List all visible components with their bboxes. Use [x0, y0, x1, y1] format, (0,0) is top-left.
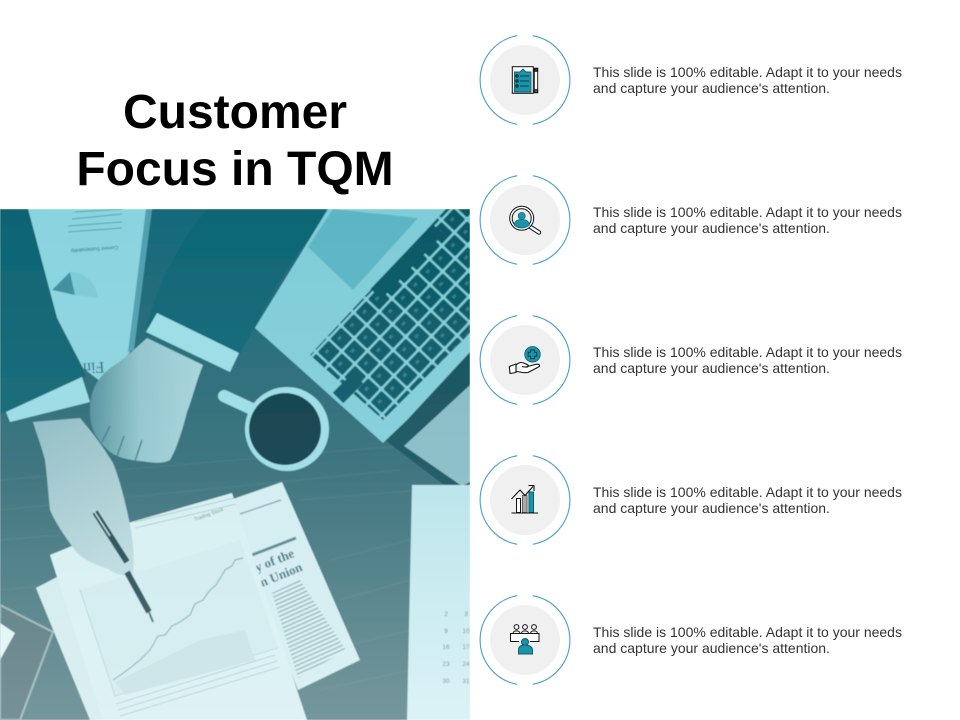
- right hand: [90, 338, 203, 463]
- item 1: clipboard ring and icon: [480, 35, 570, 125]
- text block 3: This slide is 100% editable. Adapt it to your needs: [593, 344, 902, 360]
- trading report with chart: [36, 493, 307, 720]
- item 2: magnifier ring and icon: [480, 175, 570, 265]
- calendar sheet: 9: [444, 628, 448, 635]
- text block 2: [593, 204, 902, 236]
- text block 1: and capture your audience's attention.: [593, 80, 830, 96]
- calendar sheet: 17: [462, 644, 470, 651]
- newspaper: n Union: [258, 559, 305, 590]
- calendar sheet: 2: [444, 611, 448, 618]
- paper: top-left report: Fin: [82, 358, 105, 376]
- laptop with keyboard and tablet: [255, 209, 470, 499]
- calendar sheet: 31: [462, 678, 470, 685]
- icon: bar chart with rising arrow: [512, 486, 538, 513]
- text block 3: [593, 344, 902, 376]
- text block 5: [593, 624, 902, 656]
- newspaper: [230, 482, 360, 690]
- icon: audience and speaker: [510, 625, 539, 654]
- text block 4: [593, 484, 902, 516]
- paper: top-left report: [28, 209, 152, 385]
- item 5: meeting ring and icon: [480, 595, 570, 685]
- text block 2: This slide is 100% editable. Adapt it to your needs: [593, 204, 902, 220]
- text block 5: This slide is 100% editable. Adapt it to your needs: [593, 624, 902, 640]
- right sleeve and cuff: [144, 209, 330, 372]
- left hand with pen: [33, 418, 153, 622]
- trading report with chart: Trading Stock: [194, 507, 225, 523]
- icon: hand holding medical plus: [509, 346, 540, 374]
- photo: business desk with teal duotone: [0, 209, 470, 720]
- calendar sheet: 16: [442, 644, 450, 651]
- lower-left tablet: [0, 605, 53, 720]
- title: Focus in TQM: [76, 143, 394, 196]
- left sleeve and cuff: [0, 209, 90, 422]
- title: [76, 86, 394, 196]
- text block 1: This slide is 100% editable. Adapt it to your needs: [593, 64, 902, 80]
- title: Customer: [123, 86, 347, 139]
- calendar sheet: 10: [462, 628, 470, 635]
- newspaper: y of the: [253, 545, 296, 575]
- calendar sheet: [407, 485, 470, 720]
- paper: top-left report: Current Sustainability: [70, 244, 118, 253]
- item 3: hand ring and icon: [480, 315, 570, 405]
- calendar sheet: 30: [442, 678, 450, 685]
- text block 3: and capture your audience's attention.: [593, 360, 830, 376]
- item 4: growth chart ring and icon: [480, 455, 570, 545]
- icon: magnifier with person: [510, 206, 539, 232]
- text block 4: and capture your audience's attention.: [593, 500, 830, 516]
- text block 1: [593, 64, 902, 96]
- calendar sheet: 24: [462, 661, 470, 668]
- icon: clipboard and pencil: [512, 67, 538, 93]
- text block 5: and capture your audience's attention.: [593, 640, 830, 656]
- coffee cup: [224, 387, 329, 471]
- text block 2: and capture your audience's attention.: [593, 220, 830, 236]
- calendar sheet: 23: [442, 661, 450, 668]
- calendar sheet: 3: [464, 611, 468, 618]
- text block 4: This slide is 100% editable. Adapt it to your needs: [593, 484, 902, 500]
